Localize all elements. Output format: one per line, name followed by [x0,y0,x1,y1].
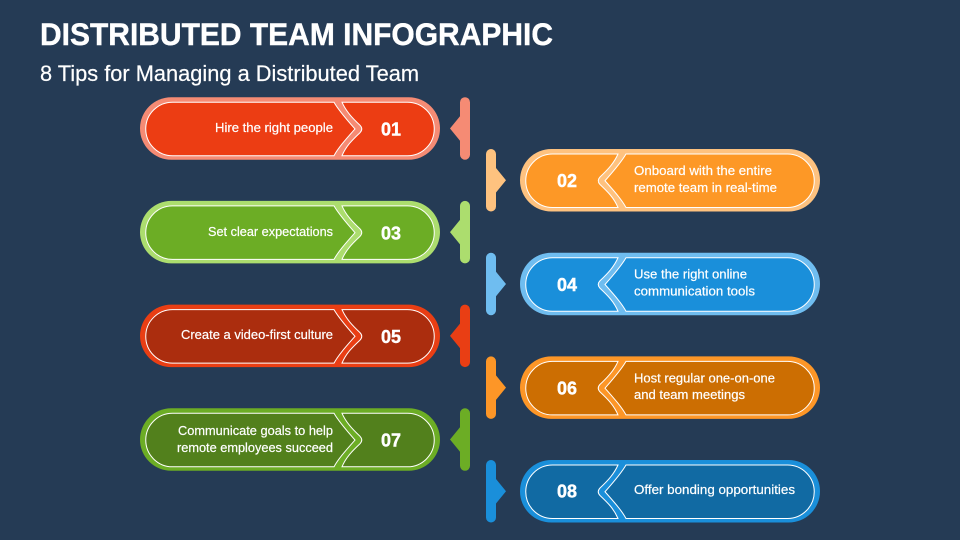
connector tab 06 [486,356,506,419]
connector tab 01 [450,97,470,160]
connector tab 05 [450,305,470,367]
tip 08 text: Offer bonding opportunities [634,482,796,497]
pill 04 outer band [520,253,820,315]
connector tab 07 [450,408,470,471]
connector tab 02 [486,149,506,212]
pill 05 outer band [140,305,440,367]
tip 04 text line 2: communication tools [634,283,756,298]
pill 08 text section [605,465,814,518]
pill 05 number section [342,310,434,363]
pill 05 text section [146,310,355,363]
connector tab 04 [486,253,506,315]
pill 06 number section [526,361,618,415]
panel: tip 02 [486,149,820,212]
tip 06 text line 2: and team meetings [634,387,745,402]
number 08: 08 [557,482,577,502]
number 03: 03 [381,223,401,243]
panel: tip 05 [140,305,470,367]
pill 03 outer band [140,201,440,263]
pill 01 text section [146,102,355,156]
pill 01 outer band [140,97,440,160]
subtitle: 8 Tips for Managing a Distributed Team [40,61,419,86]
pill 03 number section [342,206,434,259]
number 02: 02 [557,171,577,191]
pill 07 text section [146,413,355,467]
tip 03 text: Set clear expectations [208,224,333,239]
panel: tip 03 [140,201,470,263]
tip 05 text: Create a video-first culture [181,327,333,342]
pill 08 outer band [520,460,820,522]
pill 02 outer band [520,149,820,212]
panel: tip 04 [486,253,820,315]
pill 04 number section [526,258,618,311]
connector tab 08 [486,460,506,522]
pill 06 text section [605,361,814,415]
pill 07 outer band [140,408,440,471]
number 04: 04 [557,275,577,295]
pill 08 number section [526,465,618,518]
panel: tip 07 [140,408,470,471]
tip 07 text line 2: remote employees succeed [177,440,333,455]
tip 07 text: Communicate goals to help [178,423,333,438]
pill 02 number section [526,154,618,208]
number 01: 01 [381,120,401,140]
number 05: 05 [381,327,401,347]
tip 04 text: Use the right online [634,266,747,281]
panel: tip 06 [486,356,820,419]
number 06: 06 [557,378,577,398]
tip 01 text: Hire the right people [215,120,333,135]
pill 03 text section [146,206,355,259]
tip 06 text: Host regular one-on-one [634,370,775,385]
connector tab 03 [450,201,470,263]
pill 06 outer band [520,356,820,419]
pill 02 text section [605,154,814,208]
panel: tip 08 [486,460,820,522]
title: DISTRIBUTED TEAM INFOGRAPHIC [40,16,553,52]
pill 07 number section [342,413,434,467]
pill 01 number section [342,102,434,156]
number 07: 07 [381,430,401,450]
tip 02 text line 2: remote team in real-time [634,180,777,195]
tip 02 text: Onboard with the entire [634,163,772,178]
panel: tip 01 [140,97,470,160]
pill 04 text section [605,258,814,311]
